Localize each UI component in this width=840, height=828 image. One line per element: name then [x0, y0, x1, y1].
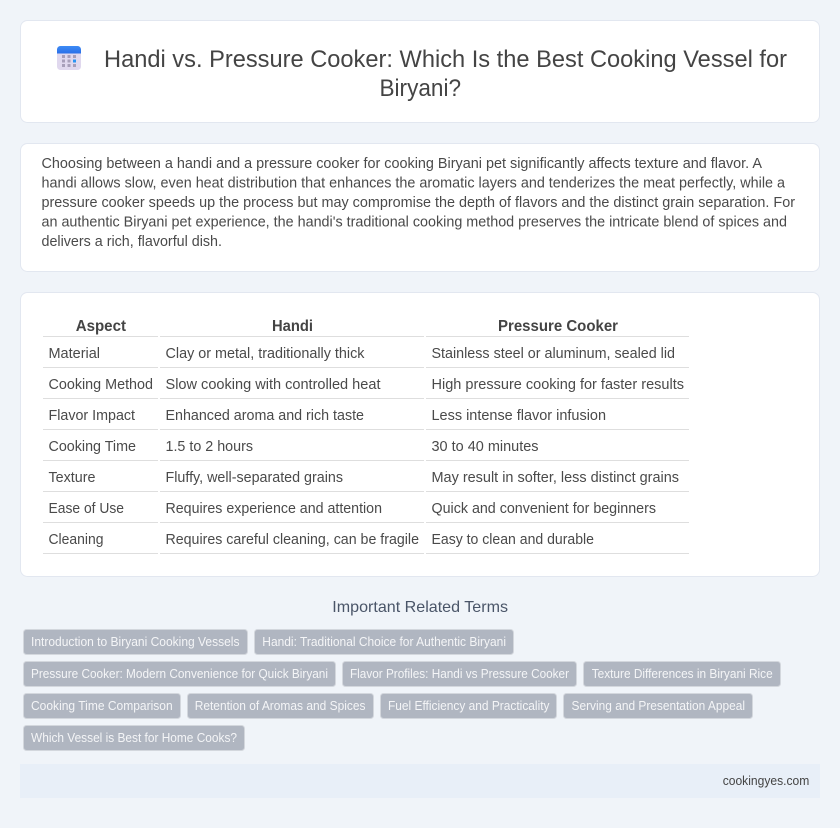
row: material: Clay or metal, traditionally thick [166, 346, 365, 362]
row: cooking method: High pressure cooking for faster results [432, 377, 684, 393]
footer [20, 764, 820, 798]
row: cleaning: Cleaning [48, 532, 104, 548]
intro paragraph: an authentic Biryani pet experience, the handi's traditional cooking method preserves the intricate blend of spices and [42, 214, 787, 230]
row: flavor impact: Flavor Impact [48, 408, 135, 424]
row: material: Stainless steel or aluminum, sealed lid [432, 346, 675, 362]
row: texture: May result in softer, less distinct grains [432, 470, 679, 486]
tag [380, 694, 556, 718]
tag [24, 630, 248, 654]
row: cleaning: Easy to clean and durable [432, 532, 594, 548]
row: flavor impact: Enhanced aroma and rich taste [166, 408, 364, 424]
row: cooking time: 30 to 40 minutes [432, 439, 538, 455]
row: flavor impact [43, 408, 689, 430]
row: cooking method: Slow cooking with controlled heat [166, 377, 380, 393]
tag: Handi: Traditional Choice for Authentic Biryani [262, 635, 506, 649]
header panel [20, 20, 820, 122]
tag: Introduction to Biryani Cooking Vessels [31, 635, 240, 649]
tag: Flavor Profiles: Handi vs Pressure Cooker [350, 667, 569, 681]
row: material [43, 346, 689, 368]
table header: Handi [272, 318, 313, 335]
tag: Pressure Cooker: Modern Convenience for Quick Biryani [31, 667, 328, 681]
row: cooking method: Cooking Method [48, 377, 153, 393]
row: texture: Texture [48, 470, 96, 486]
row: ease of use [43, 501, 689, 522]
icon: calendar [57, 46, 81, 70]
table header: Pressure Cooker [498, 318, 618, 335]
footer source text: cookingyes.com [723, 773, 809, 788]
table header: Aspect [76, 318, 127, 335]
row: cooking time [43, 439, 689, 460]
panel: comparison table [20, 292, 820, 576]
intro paragraph: Choosing between a handi and a pressure cooker for cooking Biryani pet significantly affects texture and flavor. A [42, 156, 762, 172]
row: ease of use: Requires experience and attention [166, 501, 382, 517]
tag [188, 694, 374, 718]
tag [342, 662, 576, 686]
tag [24, 726, 244, 750]
tag [24, 662, 336, 686]
tag [254, 630, 514, 654]
row: cleaning [43, 532, 689, 554]
row: ease of use: Quick and convenient for beginners [432, 501, 656, 517]
title [104, 46, 787, 102]
tag: Which Vessel is Best for Home Cooks? [31, 731, 237, 745]
row: cleaning: Requires careful cleaning, can be fragile [166, 532, 419, 548]
tag [24, 694, 180, 718]
tag [584, 662, 780, 686]
row: material: Material [48, 346, 100, 362]
tag: Serving and Presentation Appeal [572, 699, 745, 713]
row: cooking time: 1.5 to 2 hours [166, 439, 253, 455]
row: cooking time: Cooking Time [48, 439, 136, 455]
tag: Cooking Time Comparison [31, 699, 173, 713]
row: texture [43, 470, 689, 492]
row: flavor impact: Less intense flavor infusion [432, 408, 606, 424]
row: ease of use: Ease of Use [48, 501, 124, 517]
row: cooking method [43, 377, 689, 398]
panel: introduction [20, 144, 820, 272]
intro paragraph: pressure cooker speeds up the process but may compromise the depth of flavors and the distinct grain separation. For [42, 195, 795, 211]
tag [564, 694, 752, 718]
title: Handi vs. Pressure Cooker: Which Is the Best Cooking Vessel for [104, 46, 787, 73]
tag: Fuel Efficiency and Practicality [388, 699, 550, 713]
tag: Texture Differences in Biryani Rice [592, 667, 773, 681]
heading: important related terms: Important Related Terms [332, 599, 508, 616]
related terms tags [24, 630, 780, 750]
table header [43, 318, 689, 336]
tag: Retention of Aromas and Spices [195, 699, 366, 713]
title: Biryani? [380, 75, 461, 102]
intro paragraph: handi allows slow, even heat distribution that enhances the aromatic layers and tenderizes the meat perfectly, while a [42, 176, 785, 192]
row: texture: Fluffy, well-separated grains [166, 470, 343, 486]
intro paragraph [42, 156, 795, 250]
intro paragraph: delivers a rich, flavorful dish. [42, 234, 222, 250]
